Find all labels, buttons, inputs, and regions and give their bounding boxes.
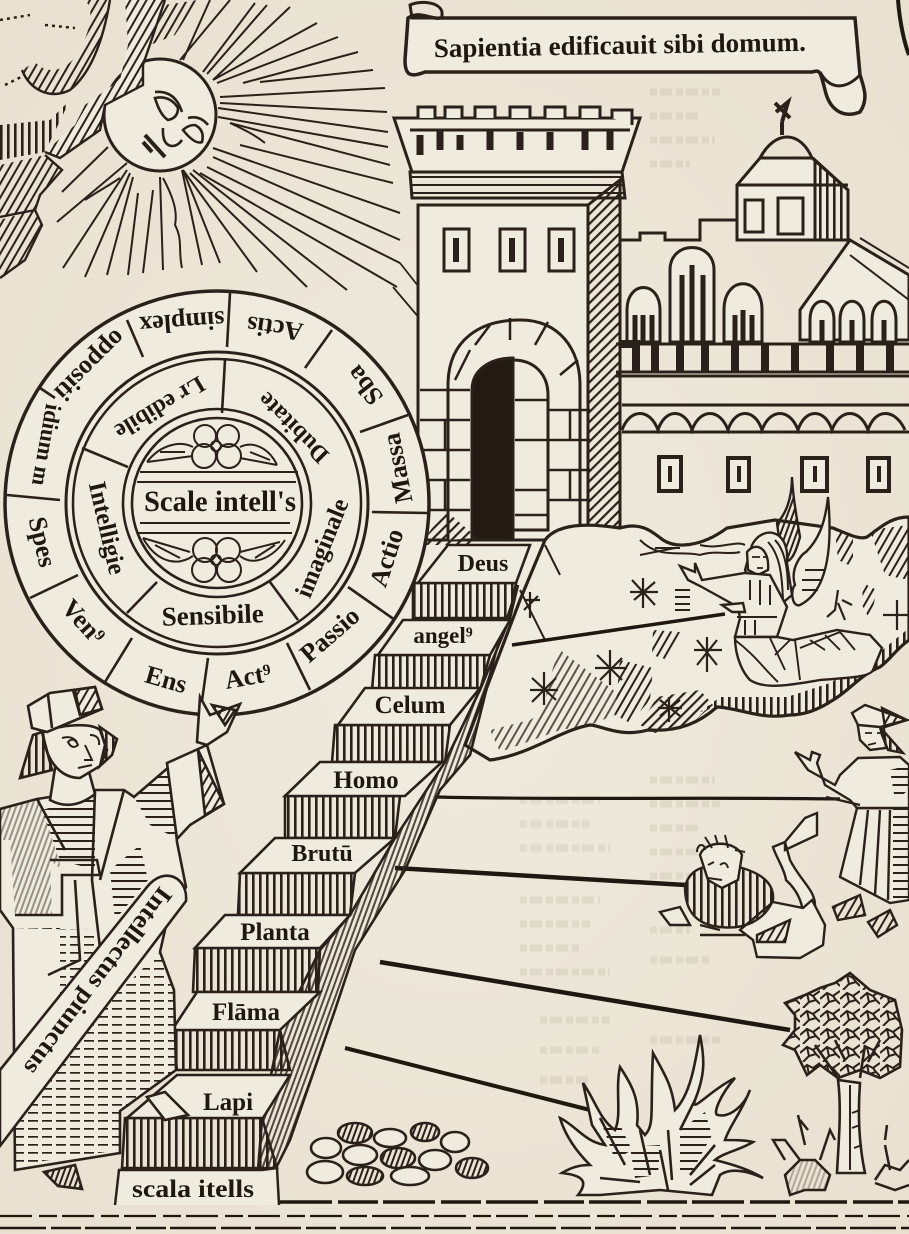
icon: sun rays bbox=[57, 0, 470, 378]
hatching of cloud underside bbox=[700, 628, 909, 716]
small plants bbox=[773, 1115, 909, 1195]
connecting lines to stairs bbox=[345, 614, 840, 1110]
arms and robe bbox=[680, 563, 787, 637]
dome bbox=[737, 158, 848, 240]
wheel title: Scale intell's bbox=[144, 485, 296, 518]
tread: Lapis bbox=[127, 1075, 290, 1118]
scroll banner bbox=[0, 876, 186, 1146]
ground lines bbox=[0, 1202, 909, 1228]
head bbox=[43, 725, 107, 778]
door arch bbox=[448, 320, 580, 540]
tread: Lapis: Lapi bbox=[203, 1089, 253, 1116]
icon: sun face bbox=[104, 59, 216, 171]
outer ring labels: Act⁹ bbox=[222, 658, 274, 695]
right scholar bbox=[795, 705, 909, 937]
palace bbox=[616, 102, 909, 525]
head bbox=[857, 720, 886, 750]
inner ring labels: Intelligie bbox=[83, 479, 130, 577]
icon: stars bbox=[524, 578, 909, 722]
tread: Planta: Planta bbox=[240, 919, 310, 946]
upper windows bbox=[659, 457, 889, 491]
tread: Deus bbox=[418, 545, 530, 583]
inner ring labels: imaginale bbox=[290, 495, 354, 602]
hind body bbox=[740, 900, 825, 958]
left scholar bbox=[0, 687, 240, 1189]
fire bbox=[560, 1035, 763, 1195]
outer ring labels: oppositi bbox=[49, 324, 132, 407]
foot and lower hand bbox=[44, 1165, 82, 1189]
outer ring labels bbox=[23, 305, 418, 699]
torso and arm bbox=[795, 752, 909, 808]
outer ring labels: Actis bbox=[245, 310, 305, 347]
outer ring labels: Ven⁹ bbox=[56, 593, 111, 650]
wheel diagram bbox=[5, 291, 429, 715]
banner: Sapientia edificauit sibi domum bbox=[405, 2, 865, 114]
cap bbox=[28, 687, 102, 732]
clouds with stars bbox=[465, 517, 909, 760]
left scholar: Intellectus piunctus bbox=[18, 882, 177, 1080]
staircase bbox=[122, 510, 530, 1170]
face bbox=[700, 844, 742, 888]
shoes bbox=[833, 895, 865, 920]
stones bbox=[307, 1123, 488, 1185]
tread: Celum: Celum bbox=[375, 692, 446, 719]
outer ring labels: Actio bbox=[364, 525, 409, 590]
stair side wall bbox=[258, 585, 518, 1170]
tower bbox=[394, 107, 640, 540]
sector dividers bbox=[7, 293, 427, 715]
lion bbox=[660, 813, 825, 958]
wings bbox=[777, 477, 800, 561]
tread: Brutum bbox=[240, 838, 395, 873]
cap bbox=[852, 705, 907, 727]
paw bbox=[660, 907, 690, 925]
tread: Flamma bbox=[172, 992, 320, 1030]
outer ring labels: idium m bbox=[27, 402, 66, 488]
angel bbox=[680, 477, 882, 686]
robe bbox=[0, 766, 186, 1170]
outer ring labels: Ens bbox=[142, 660, 190, 699]
ground label: scala intellectus: scala itells bbox=[132, 1176, 254, 1203]
tail bbox=[773, 813, 817, 918]
tread: angelus: angel⁹ bbox=[413, 623, 473, 648]
tread: Deus: Deus bbox=[458, 551, 508, 577]
tread: angelus bbox=[378, 620, 510, 655]
cloud: top left bbox=[0, 0, 198, 278]
bleed-through text from reverse page bbox=[520, 92, 725, 1080]
outer ring labels: Sba bbox=[340, 360, 389, 411]
risers bbox=[413, 583, 516, 618]
tread: Celum bbox=[338, 688, 480, 725]
outer ring labels: Massa bbox=[377, 431, 418, 506]
top right border curve bbox=[898, 0, 909, 55]
centre panel bbox=[137, 425, 298, 582]
sun with rays bbox=[57, 0, 470, 378]
head bbox=[745, 533, 792, 605]
neck bbox=[50, 768, 95, 805]
ground label: scala intellectus bbox=[115, 1168, 279, 1205]
outer ring labels: simplex bbox=[139, 305, 226, 340]
inner ring labels bbox=[83, 370, 354, 632]
tread: Planta bbox=[195, 915, 350, 948]
inner ring labels: Dubitate bbox=[253, 386, 334, 468]
tree bbox=[783, 973, 902, 1173]
inner ring labels: Lr edibile bbox=[110, 370, 209, 444]
tread: Homo: Homo bbox=[333, 767, 399, 794]
tread: Homo bbox=[285, 762, 442, 796]
outer ring labels: Passio bbox=[294, 601, 365, 668]
tread: Brutum: Brutū bbox=[291, 841, 353, 867]
skirt bbox=[840, 808, 909, 903]
tower windows bbox=[444, 229, 574, 271]
inner ring labels: Sensibile bbox=[161, 598, 264, 632]
mane bbox=[685, 865, 773, 928]
kneeling legs and drapery bbox=[735, 630, 882, 686]
arched windows bbox=[627, 248, 896, 342]
tread: Flamma: Flāma bbox=[212, 999, 281, 1026]
outer ring labels: Spes bbox=[23, 514, 62, 570]
raised arm bbox=[134, 766, 180, 840]
banner: Sapientia edificauit sibi domum: Sapientia edificauit sibi domum. bbox=[434, 27, 806, 63]
arcade bbox=[622, 405, 909, 432]
